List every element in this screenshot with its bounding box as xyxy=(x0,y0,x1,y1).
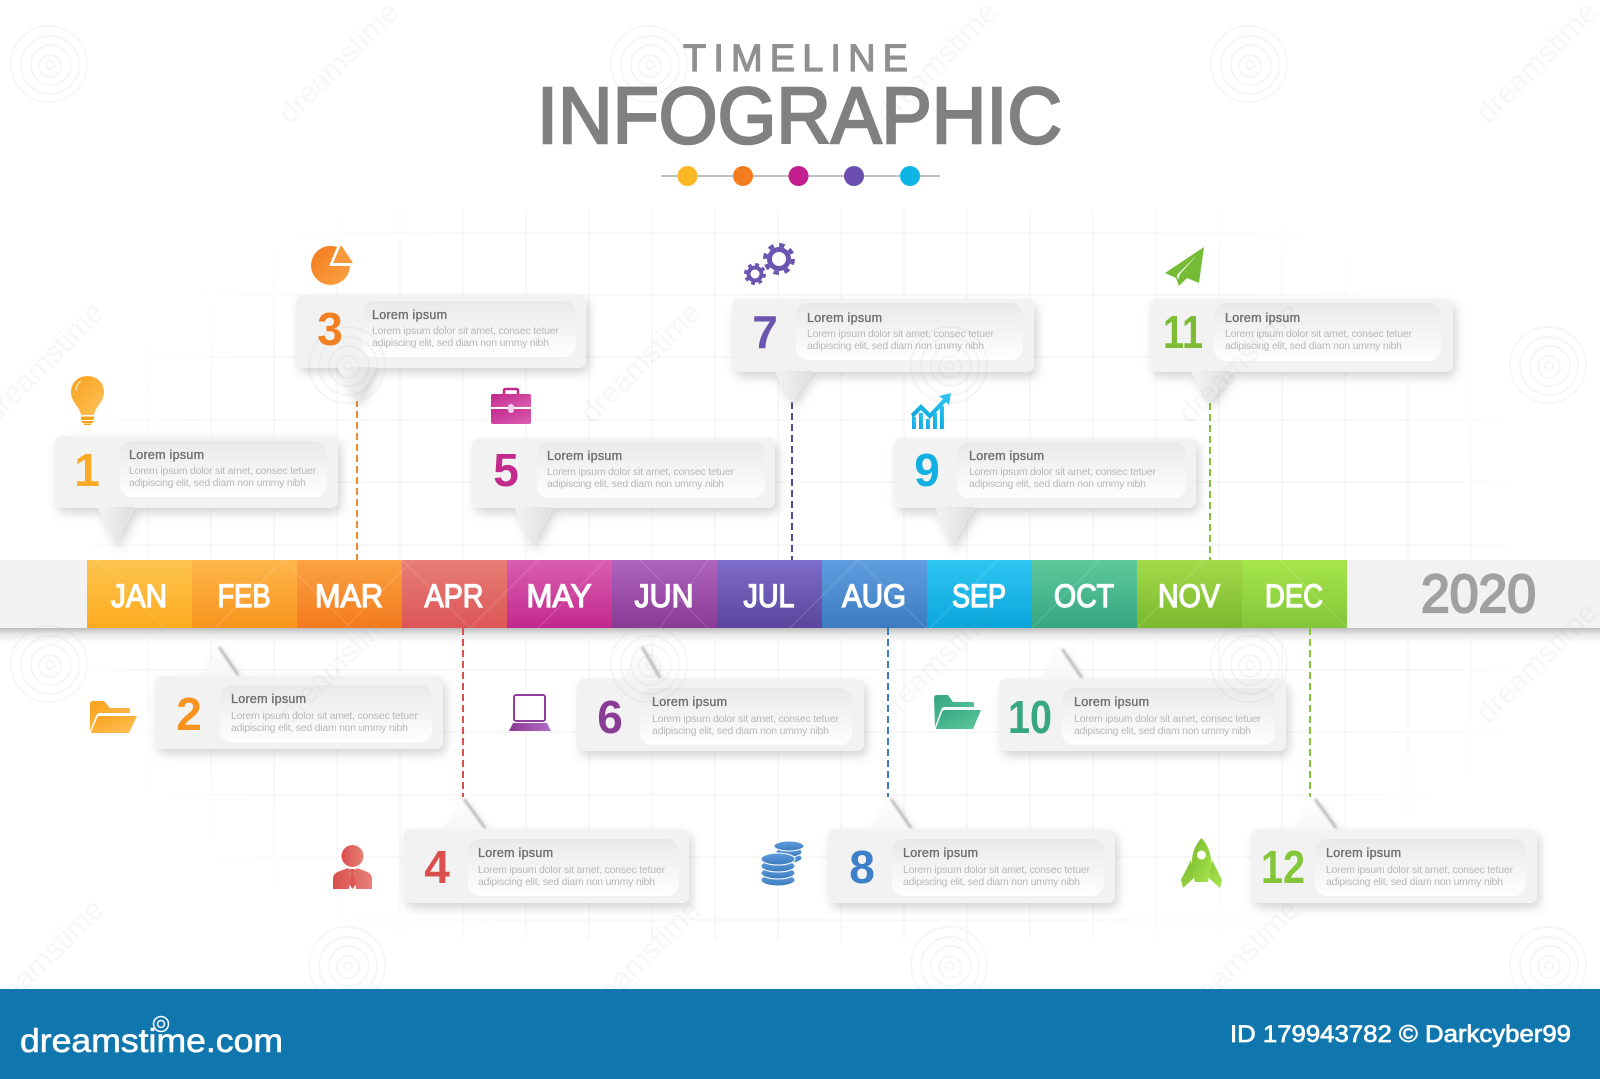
text: dreamstime xyxy=(870,596,1004,730)
card 10 xyxy=(999,647,1286,751)
month labels: NOV xyxy=(1158,578,1221,614)
month labels: APR xyxy=(424,578,484,614)
image credit: ID 179943782 © Darkcyber99 xyxy=(1230,1021,1571,1048)
card 11: Lorem ipsum xyxy=(1225,311,1300,325)
card 9 xyxy=(894,438,1196,546)
title xyxy=(537,38,1062,186)
card 12: Lorem ipsum dolor sit amet, consec tetuer xyxy=(1326,864,1514,876)
month labels: JUL xyxy=(744,578,794,614)
card 2: adipiscing elit, sed diam non ummy nibh xyxy=(231,722,408,734)
card 5 xyxy=(472,438,775,546)
card 8 xyxy=(828,797,1115,903)
month labels: DEC xyxy=(1265,578,1323,614)
card 9: Lorem ipsum dolor sit amet, consec tetuer xyxy=(969,466,1156,478)
card 1: Lorem ipsum xyxy=(129,448,204,462)
icon: briefcase xyxy=(491,389,531,424)
month labels: OCT xyxy=(1054,578,1114,614)
card 11: 11 xyxy=(1163,306,1203,358)
month labels: MAY xyxy=(526,578,592,614)
connector 4 xyxy=(462,628,464,797)
connector 3 xyxy=(356,400,358,560)
icon: paper plane xyxy=(1165,247,1204,286)
icon: light bulb xyxy=(71,376,104,425)
card 12: Lorem ipsum xyxy=(1326,846,1401,860)
icon: coins xyxy=(761,841,804,886)
timeline bar xyxy=(0,560,1600,646)
text: dreamstime xyxy=(574,296,708,430)
card 3 xyxy=(296,295,586,402)
icon: green folder xyxy=(934,695,981,729)
card 2: Lorem ipsum xyxy=(231,692,306,706)
card 2: Lorem ipsum dolor sit amet, consec tetuer xyxy=(231,710,418,722)
card 4: Lorem ipsum dolor sit amet, consec tetuer xyxy=(478,864,666,876)
card 3: Lorem ipsum dolor sit amet, consec tetuer xyxy=(372,325,560,337)
card 9: Lorem ipsum xyxy=(969,449,1044,463)
card 3: adipiscing elit, sed diam non ummy nibh xyxy=(372,337,549,349)
card 11: adipiscing elit, sed diam non ummy nibh xyxy=(1225,340,1402,352)
card 5: Lorem ipsum xyxy=(547,449,622,463)
card 8: Lorem ipsum xyxy=(903,846,978,860)
month labels: FEB xyxy=(218,578,270,614)
card 9: adipiscing elit, sed diam non ummy nibh xyxy=(969,478,1146,490)
icon: rocket xyxy=(1181,838,1222,888)
month labels: AUG xyxy=(842,578,906,614)
connector 8 xyxy=(887,628,889,797)
card 6: 6 xyxy=(597,691,623,743)
card 3: 3 xyxy=(317,303,343,355)
title dots xyxy=(661,166,940,186)
card 10: 10 xyxy=(1008,691,1052,743)
text: dreamstime xyxy=(1172,893,1306,1027)
card 1 xyxy=(55,436,338,545)
card 10: Lorem ipsum dolor sit amet, consec tetuer xyxy=(1074,713,1262,725)
text: dreamstime xyxy=(272,596,406,730)
card 3: Lorem ipsum xyxy=(372,308,447,322)
card 1: 1 xyxy=(74,444,100,496)
card 7: Lorem ipsum dolor sit amet, consec tetuer xyxy=(807,328,994,340)
card 11: Lorem ipsum dolor sit amet, consec tetuer xyxy=(1225,328,1412,340)
card 5: 5 xyxy=(493,444,519,496)
card 8: adipiscing elit, sed diam non ummy nibh xyxy=(903,876,1080,888)
card 6: Lorem ipsum dolor sit amet, consec tetuer xyxy=(652,713,840,725)
connector 12 xyxy=(1309,628,1311,797)
card 7: adipiscing elit, sed diam non ummy nibh xyxy=(807,340,984,352)
card 7: Lorem ipsum xyxy=(807,311,882,325)
text: dreamstime xyxy=(1470,596,1600,730)
card 12: adipiscing elit, sed diam non ummy nibh xyxy=(1326,876,1503,888)
card 12 xyxy=(1251,797,1537,903)
icon: gears xyxy=(746,245,793,284)
card 5: adipiscing elit, sed diam non ummy nibh xyxy=(547,478,724,490)
month labels: MAR xyxy=(315,578,383,614)
connector 7 xyxy=(791,402,793,560)
month labels: JAN xyxy=(111,578,167,614)
month labels: JUN xyxy=(634,578,694,614)
card 4: 4 xyxy=(424,841,450,893)
icon: pie chart xyxy=(311,245,353,285)
card 8: Lorem ipsum dolor sit amet, consec tetuer xyxy=(903,864,1090,876)
card 9: 9 xyxy=(914,444,940,496)
card 10: Lorem ipsum xyxy=(1074,695,1149,709)
month labels: SEP xyxy=(952,578,1006,614)
card 6: Lorem ipsum xyxy=(652,695,727,709)
title: timeline: TIMELINE xyxy=(683,38,908,80)
footer banner xyxy=(0,989,1600,1079)
icon: person xyxy=(333,845,372,889)
connector 11 xyxy=(1209,403,1211,560)
year: 2020 xyxy=(1421,564,1536,624)
card 2 xyxy=(155,645,443,749)
card 12: 12 xyxy=(1261,841,1305,893)
card 2: 2 xyxy=(176,688,202,740)
card 4: Lorem ipsum xyxy=(478,846,553,860)
card 4: adipiscing elit, sed diam non ummy nibh xyxy=(478,876,655,888)
card 1: Lorem ipsum dolor sit amet, consec tetuer xyxy=(129,465,316,477)
card 6 xyxy=(577,645,864,751)
icon: growth chart xyxy=(911,393,951,429)
card 7 xyxy=(732,299,1034,403)
month labels xyxy=(111,578,1323,614)
card 4 xyxy=(403,797,689,903)
card 7: 7 xyxy=(752,306,778,358)
brand logo: dreamstime.com xyxy=(20,1022,283,1059)
icon: laptop xyxy=(509,695,551,731)
icon: orange folder xyxy=(90,701,137,733)
card 8: 8 xyxy=(849,841,875,893)
card 6: adipiscing elit, sed diam non ummy nibh xyxy=(652,725,829,737)
card 5: Lorem ipsum dolor sit amet, consec tetuer xyxy=(547,466,734,478)
text: dreamstime xyxy=(1172,296,1306,430)
card 11 xyxy=(1150,299,1453,403)
card 1: adipiscing elit, sed diam non ummy nibh xyxy=(129,477,306,489)
text: dreamstime xyxy=(574,893,708,1027)
card 10: adipiscing elit, sed diam non ummy nibh xyxy=(1074,725,1251,737)
title: infographic: INFOGRAPHIC xyxy=(537,71,1062,160)
